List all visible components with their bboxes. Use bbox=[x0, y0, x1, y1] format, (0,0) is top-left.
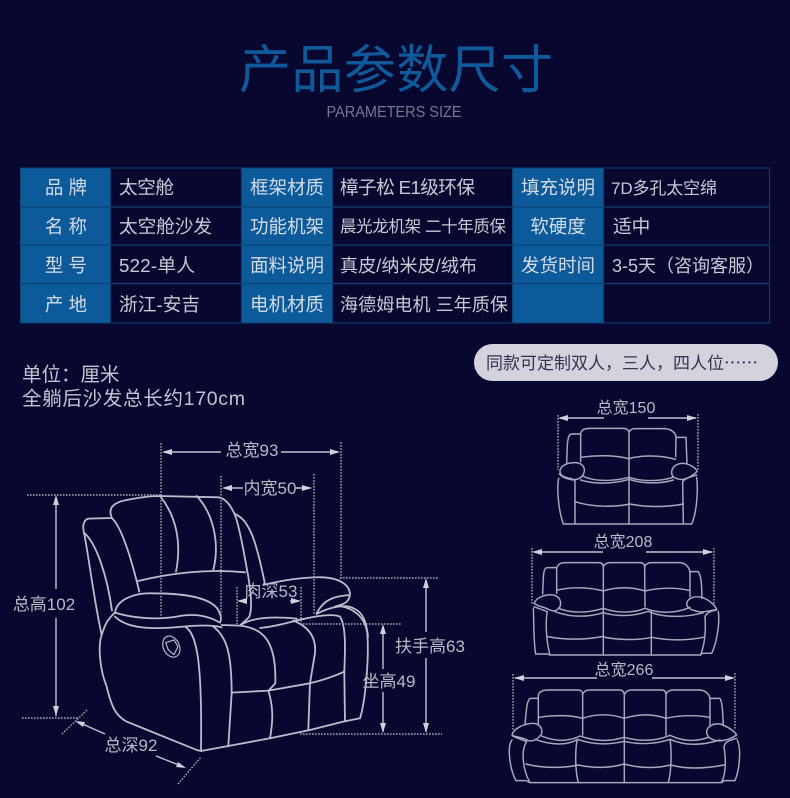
table row: brand: 框架材质 bbox=[250, 177, 324, 198]
dimension: inner depth 53: 肉深53 bbox=[245, 582, 297, 601]
icon: recliner handle bbox=[159, 633, 183, 660]
callout: custom sizes pill bbox=[474, 344, 778, 381]
dimension: total width 266: 总宽266 bbox=[595, 661, 653, 679]
four-seat sofa drawing bbox=[509, 690, 740, 783]
table row: name bbox=[45, 216, 650, 237]
unit note: 单位：厘米 bbox=[22, 364, 120, 386]
chart: four-seat sofa with width bbox=[509, 661, 740, 783]
table row: model bbox=[45, 255, 764, 276]
table row: origin: 产 地 bbox=[45, 294, 87, 315]
table row: brand: 太空舱 bbox=[119, 177, 174, 198]
two-seat sofa drawing bbox=[558, 428, 697, 524]
table row: model: 3-5天（咨询客服） bbox=[612, 256, 764, 276]
table row: model: 522-单人 bbox=[119, 255, 195, 276]
table row: model: 型 号 bbox=[45, 255, 87, 276]
table row: model: 面料说明 bbox=[250, 255, 324, 276]
dimension: total width 266 bbox=[513, 661, 735, 730]
dimension: seat height 49 bbox=[300, 624, 442, 734]
dimension: total width 150 bbox=[558, 399, 698, 470]
table row: origin: 浙江-安吉 bbox=[119, 294, 200, 315]
table row: name: 晨光龙机架 二十年质保 bbox=[340, 217, 506, 236]
table row: model: 真皮/纳米皮/绒布 bbox=[340, 256, 477, 276]
table row: origin: 电机材质 bbox=[250, 294, 324, 315]
dimension: total width 93: 总宽93 bbox=[226, 441, 278, 460]
table row: brand: 填充说明 bbox=[521, 177, 595, 198]
table row: origin bbox=[45, 294, 508, 315]
table row: name: 功能机架 bbox=[250, 216, 324, 237]
dimension: total depth 92 bbox=[62, 709, 201, 784]
dimension: seat height 49: 坐高49 bbox=[363, 672, 415, 691]
dimension: armrest height 63: 扶手高63 bbox=[395, 637, 465, 656]
unit note: 全躺后沙发总长约170cm bbox=[22, 388, 245, 410]
chart: two-seat sofa with width bbox=[558, 399, 698, 524]
dimension: total width 150: 总宽150 bbox=[597, 399, 655, 417]
table row: brand: 樟子松 E1级环保 bbox=[340, 177, 475, 198]
dimension: total width 208: 总宽208 bbox=[594, 533, 652, 551]
chair drawing bbox=[83, 496, 368, 751]
dimension: total width 208 bbox=[532, 533, 714, 604]
table row: brand: 品 牌 bbox=[45, 177, 87, 198]
dimension: total height 102 bbox=[13, 495, 160, 718]
chart: single seat chair with dimensions bbox=[13, 441, 465, 784]
dimension: armrest height 63 bbox=[340, 578, 465, 733]
dimension: total height 102: 总高102 bbox=[13, 595, 75, 614]
dimension: total width 93 bbox=[161, 441, 341, 616]
chart: three-seat sofa with width bbox=[532, 533, 719, 655]
panel: parameter table bbox=[20, 168, 770, 323]
title: 产品参数尺寸 bbox=[239, 42, 553, 100]
table row: brand: 7D多孔太空绵 bbox=[611, 179, 717, 198]
unit note bbox=[22, 364, 245, 410]
dimension: total depth 92: 总深92 bbox=[105, 736, 157, 755]
table row: origin: 海德姆电机 三年质保 bbox=[340, 295, 508, 315]
dimension: inner depth 53 bbox=[237, 582, 301, 624]
table row: name: 软硬度 bbox=[530, 216, 586, 237]
table row: name: 太空舱沙发 bbox=[119, 216, 212, 237]
table row: model: 发货时间 bbox=[521, 255, 595, 276]
callout: custom sizes pill: 同款可定制双人，三人，四人位…… bbox=[486, 349, 758, 374]
table row: brand bbox=[45, 177, 717, 198]
table row: name: 适中 bbox=[613, 216, 650, 237]
subtitle: PARAMETERS SIZE bbox=[326, 104, 462, 121]
dimension: inner width 50: 内宽50 bbox=[244, 479, 296, 498]
three-seat sofa drawing bbox=[533, 563, 719, 655]
dimension: inner width 50 bbox=[221, 474, 314, 620]
table row: name: 名 称 bbox=[45, 216, 87, 237]
